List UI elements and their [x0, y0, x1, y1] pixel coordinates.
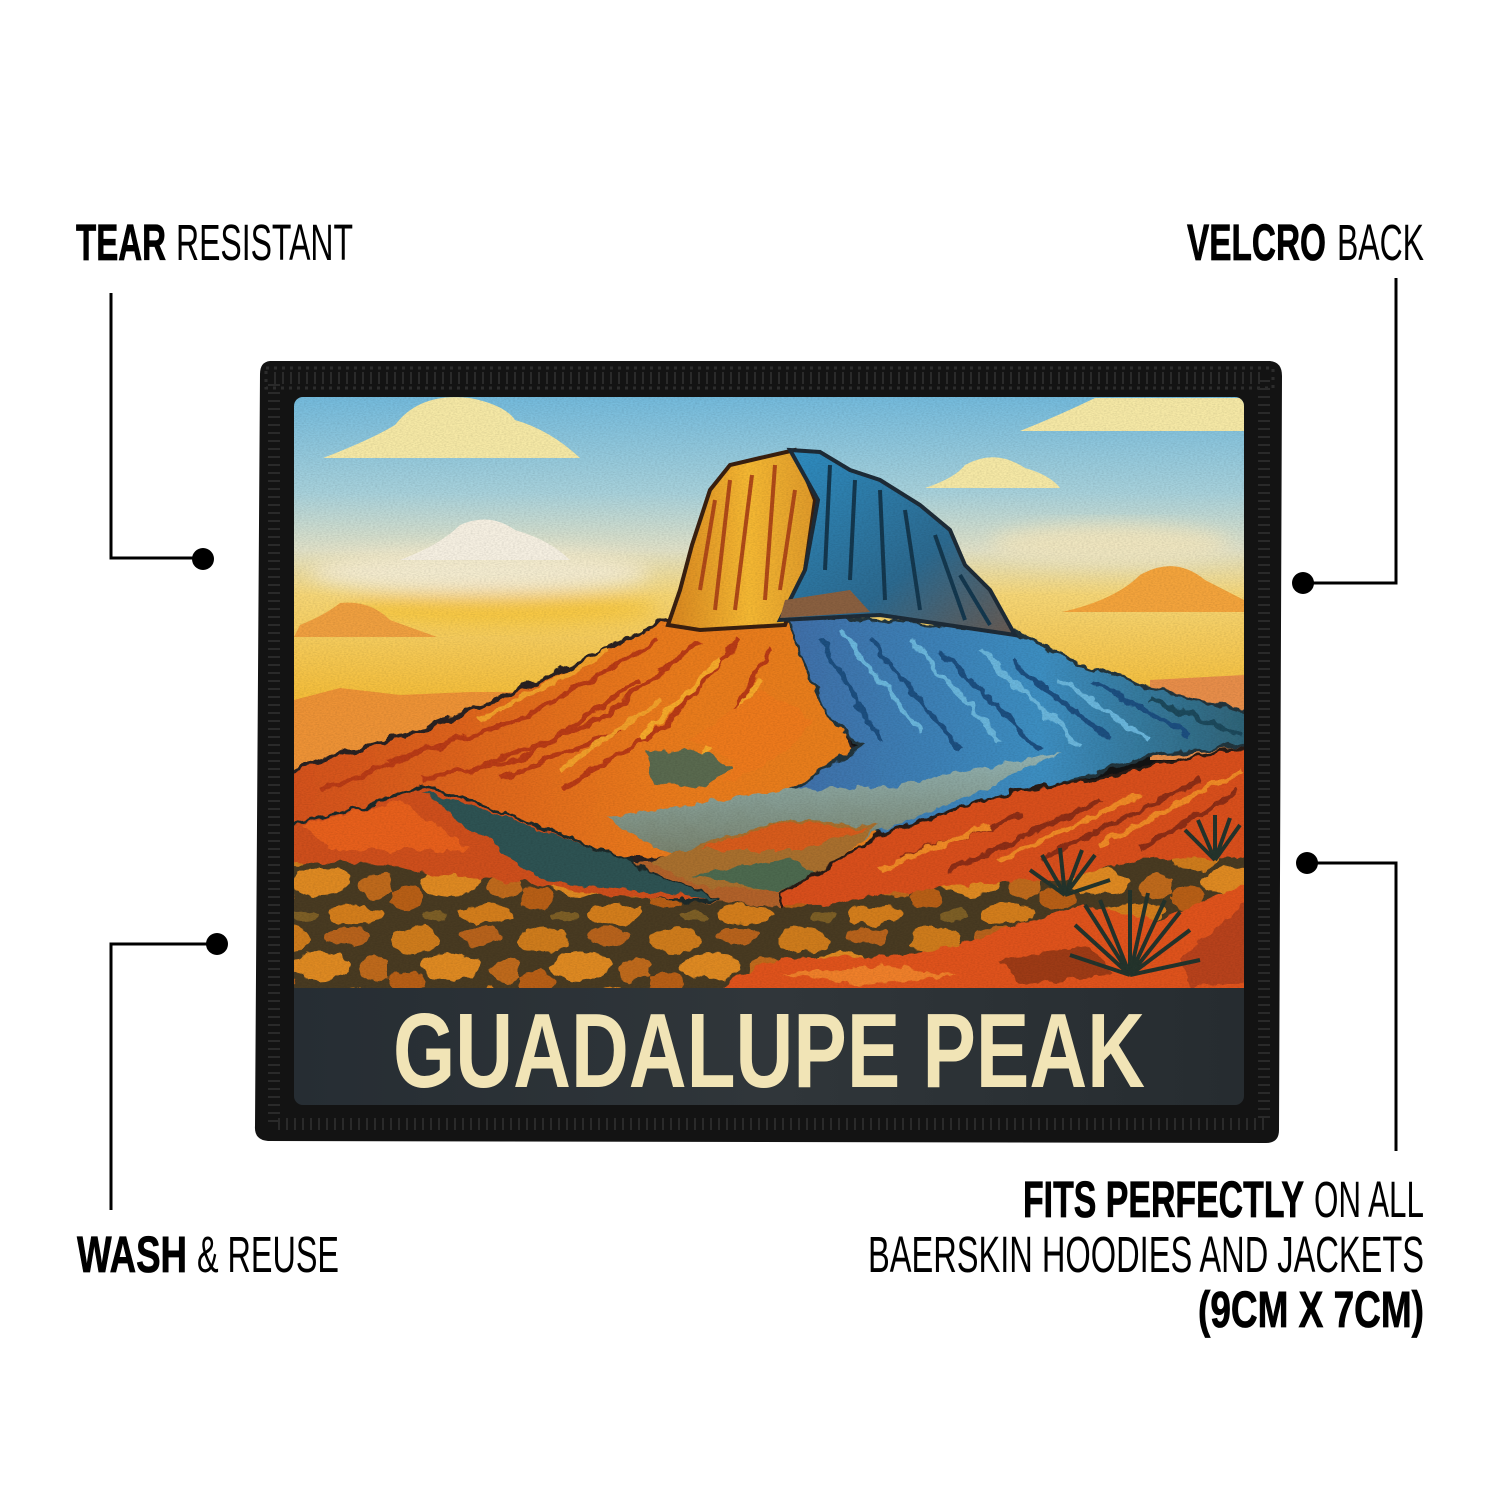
callout: tear resistant: [76, 214, 353, 570]
painted landscape: [280, 610, 1260, 1000]
callout: velcro back: VELCRO: [1187, 214, 1326, 271]
lower grey slope: [605, 752, 1060, 860]
right slope streaks: [820, 630, 1240, 750]
callout: fits perfectly: FITS PERFECTLY: [1023, 1171, 1304, 1228]
name banner: [294, 988, 1244, 1106]
underpainting: [633, 861, 783, 908]
sky: [294, 397, 1244, 717]
left foothill: [285, 785, 720, 900]
shrub foreground: [285, 858, 1255, 1000]
mountain left slope: [285, 610, 900, 860]
left slope streaks: [320, 640, 770, 790]
middle slope orange: [706, 698, 750, 768]
yucca plants: [1030, 815, 1240, 975]
summit rock base: [780, 590, 870, 618]
clouds: [294, 397, 1244, 637]
horizon haze: [310, 525, 1230, 626]
callout: fits perfectly: [868, 852, 1424, 1338]
callout: wash and reuse: & REUSE: [197, 1226, 339, 1283]
summit lit face: [668, 450, 815, 630]
mountain right slope: [788, 618, 1244, 834]
callout: wash and reuse: WASH: [77, 1226, 187, 1283]
patch artwork: [280, 397, 1260, 1110]
callout: tear resistant: RESISTANT: [176, 214, 353, 271]
summit shaded face: [780, 450, 1015, 635]
right foothill: [778, 746, 1244, 908]
right foothill streaks: [880, 770, 1240, 870]
callout: tear resistant: TEAR: [76, 214, 166, 271]
red rocks: [723, 884, 1244, 988]
patch: [255, 361, 1282, 1143]
callout: wash and reuse: [77, 933, 339, 1283]
patch title: GUADALUPE PEAK: [393, 992, 1145, 1110]
middle foothill: [650, 820, 880, 892]
dark scrub patches: [645, 748, 735, 788]
rock striations: [700, 465, 990, 625]
callout: velcro back: BACK: [1337, 214, 1424, 271]
callout: fits perfectly: ON ALL: [1314, 1171, 1424, 1228]
fabric texture: [294, 397, 1244, 989]
callout: velcro back: [1187, 214, 1424, 594]
patch border: [255, 361, 1282, 1143]
distant hills: [294, 688, 513, 770]
